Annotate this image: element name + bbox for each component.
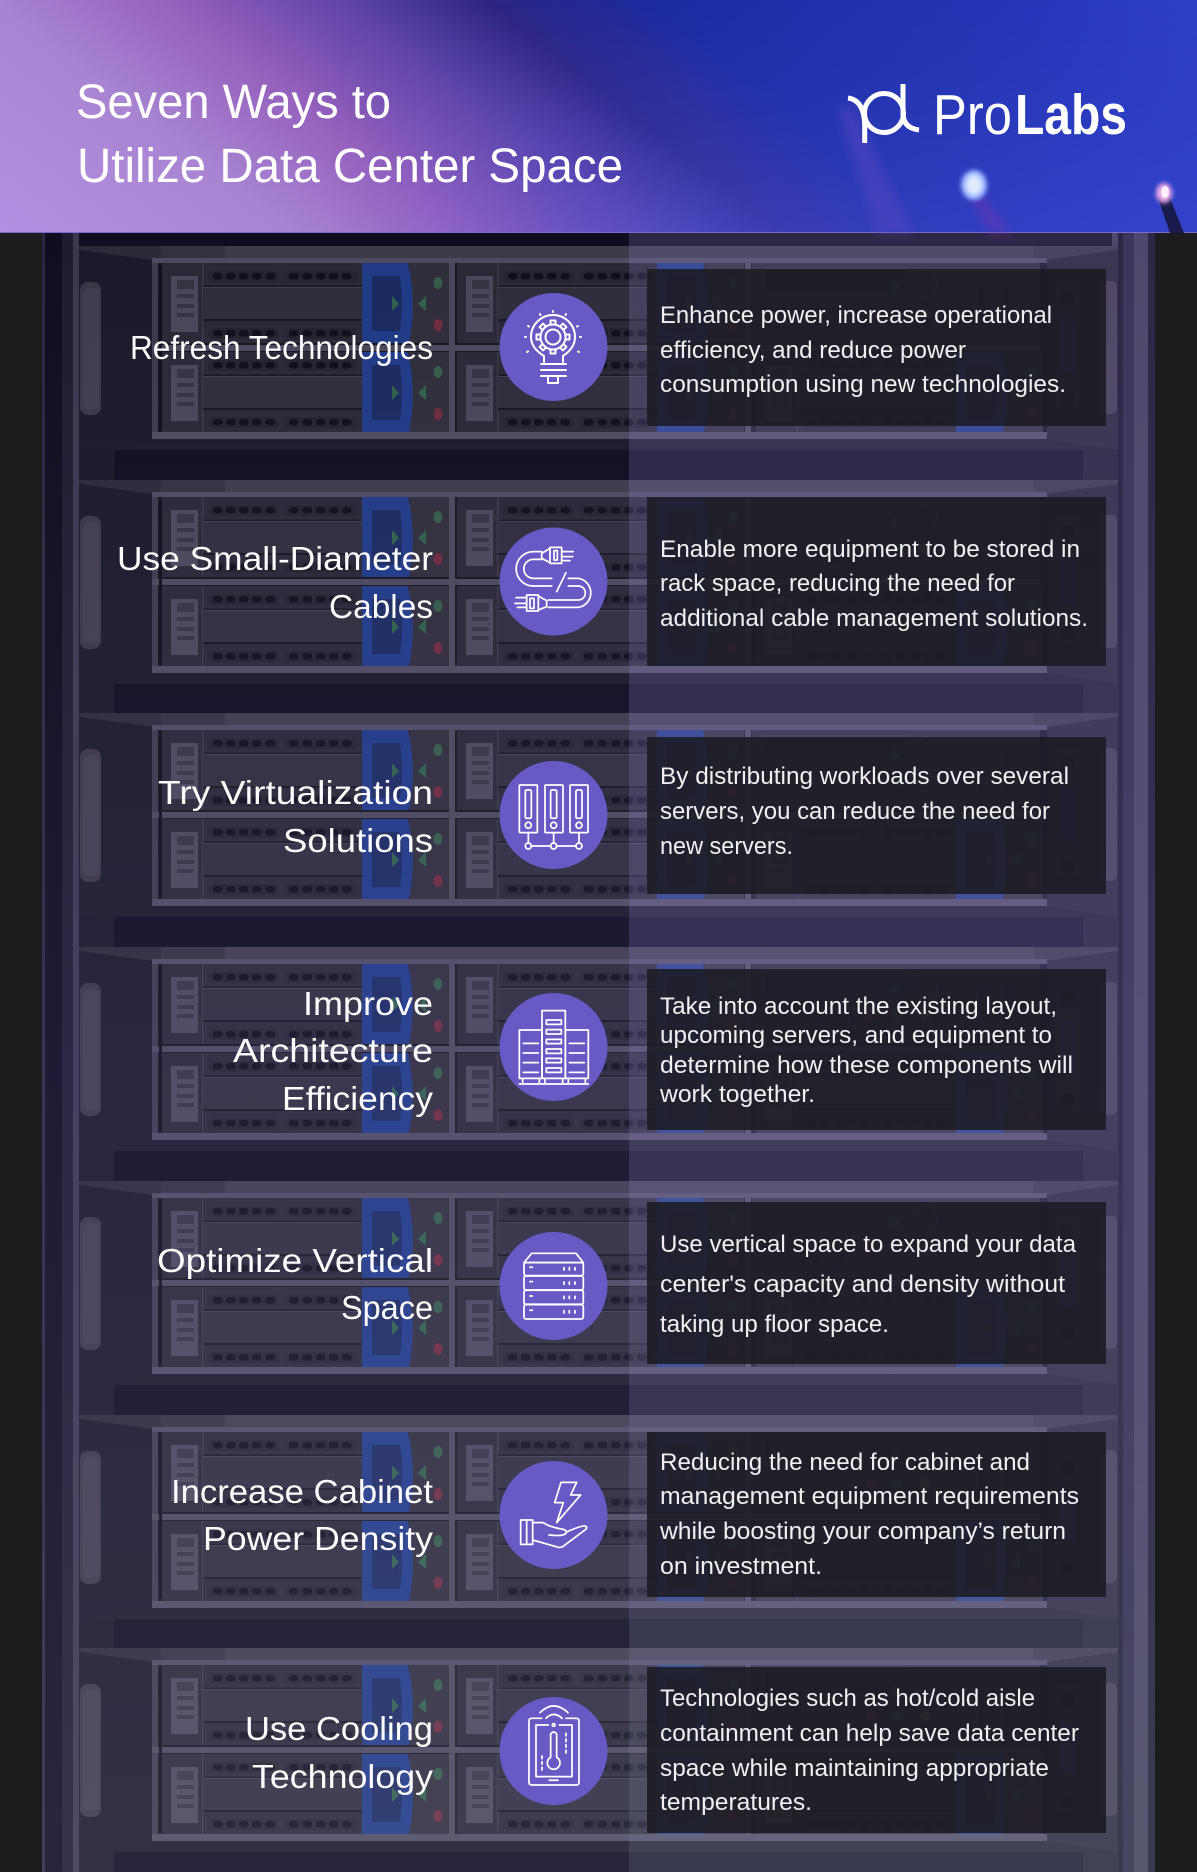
description: Enable more equipment to be stored in bbox=[660, 536, 1080, 563]
description bbox=[647, 737, 1106, 894]
heading: Refresh Technologies bbox=[130, 329, 433, 366]
description: upcoming servers, and equipment to bbox=[660, 1022, 1052, 1049]
description: management equipment requirements bbox=[660, 1483, 1079, 1510]
heading: Cables bbox=[329, 588, 433, 625]
heading: Increase Cabinet bbox=[171, 1473, 433, 1510]
description: Use vertical space to expand your data bbox=[660, 1231, 1077, 1258]
description: Technologies such as hot/cold aisle bbox=[660, 1685, 1035, 1712]
logo: ProLabs: Labs bbox=[1015, 83, 1127, 147]
panel: Optimize Vertical Space bbox=[157, 1202, 1106, 1364]
heading bbox=[117, 540, 433, 625]
icon: light bulb with gear bbox=[500, 293, 608, 401]
icon: three connected servers bbox=[500, 761, 608, 869]
panel: Try Virtualization Solutions bbox=[158, 737, 1106, 894]
description: temperatures. bbox=[660, 1789, 812, 1816]
description bbox=[647, 269, 1106, 426]
description: work together. bbox=[659, 1081, 815, 1108]
title: Seven Ways to bbox=[76, 76, 391, 129]
panel: Improve Architecture Efficiency bbox=[233, 969, 1106, 1130]
description: Enhance power, increase operational bbox=[660, 302, 1052, 329]
heading bbox=[245, 1710, 434, 1795]
description: Reducing the need for cabinet and bbox=[660, 1449, 1030, 1476]
description: consumption using new technologies. bbox=[660, 371, 1066, 398]
heading: Technology bbox=[252, 1758, 434, 1795]
title: Utilize Data Center Space bbox=[77, 140, 623, 193]
description: center's capacity and density without bbox=[660, 1271, 1065, 1298]
icon: hand with lightning bolt bbox=[500, 1461, 608, 1569]
heading: Architecture bbox=[233, 1032, 433, 1069]
title bbox=[76, 76, 623, 193]
panel: Refresh Technologies bbox=[130, 269, 1106, 426]
heading bbox=[171, 1473, 434, 1557]
description: space while maintaining appropriate bbox=[660, 1755, 1049, 1782]
description: By distributing workloads over several bbox=[660, 763, 1069, 790]
description: rack space, reducing the need for bbox=[660, 570, 1015, 597]
heading: Power Density bbox=[203, 1520, 434, 1557]
heading: Solutions bbox=[283, 822, 433, 859]
header banner bbox=[0, 0, 1197, 233]
logo: ProLabs bbox=[848, 83, 1127, 147]
heading: Use Cooling bbox=[245, 1710, 433, 1747]
icon: building bbox=[500, 993, 608, 1101]
heading: Space bbox=[341, 1289, 433, 1326]
description: containment can help save data center bbox=[660, 1720, 1079, 1747]
heading: Optimize Vertical bbox=[157, 1242, 433, 1279]
description: new servers. bbox=[660, 833, 793, 860]
heading: Improve bbox=[303, 985, 433, 1022]
description: additional cable management solutions. bbox=[660, 605, 1088, 632]
description: servers, you can reduce the need for bbox=[660, 798, 1050, 825]
heading bbox=[158, 774, 433, 859]
description bbox=[647, 969, 1106, 1130]
description: efficiency, and reduce power bbox=[660, 337, 966, 364]
panel: Use Cooling Technology bbox=[245, 1667, 1106, 1833]
panel: Use Small-Diameter Cables bbox=[117, 497, 1106, 666]
heading: Try Virtualization bbox=[158, 774, 433, 811]
description: Take into account the existing layout, bbox=[660, 993, 1057, 1020]
icon: server stack bbox=[500, 1232, 608, 1340]
description: on investment. bbox=[660, 1553, 822, 1580]
description bbox=[647, 1432, 1106, 1597]
logo: ProLabs: Pro bbox=[933, 83, 1012, 147]
description bbox=[647, 497, 1106, 666]
description: while boosting your company’s return bbox=[659, 1518, 1066, 1545]
description: taking up floor space. bbox=[660, 1311, 889, 1338]
icon: cables bbox=[500, 528, 608, 636]
heading: Efficiency bbox=[282, 1080, 434, 1117]
heading bbox=[233, 985, 434, 1117]
description bbox=[647, 1667, 1106, 1833]
heading: Use Small-Diameter bbox=[117, 540, 433, 577]
heading bbox=[157, 1242, 433, 1326]
panel: Increase Cabinet Power Density bbox=[171, 1432, 1106, 1597]
description bbox=[647, 1202, 1106, 1364]
icon: smart thermostat tablet bbox=[500, 1697, 608, 1805]
description: determine how these components will bbox=[660, 1052, 1073, 1079]
